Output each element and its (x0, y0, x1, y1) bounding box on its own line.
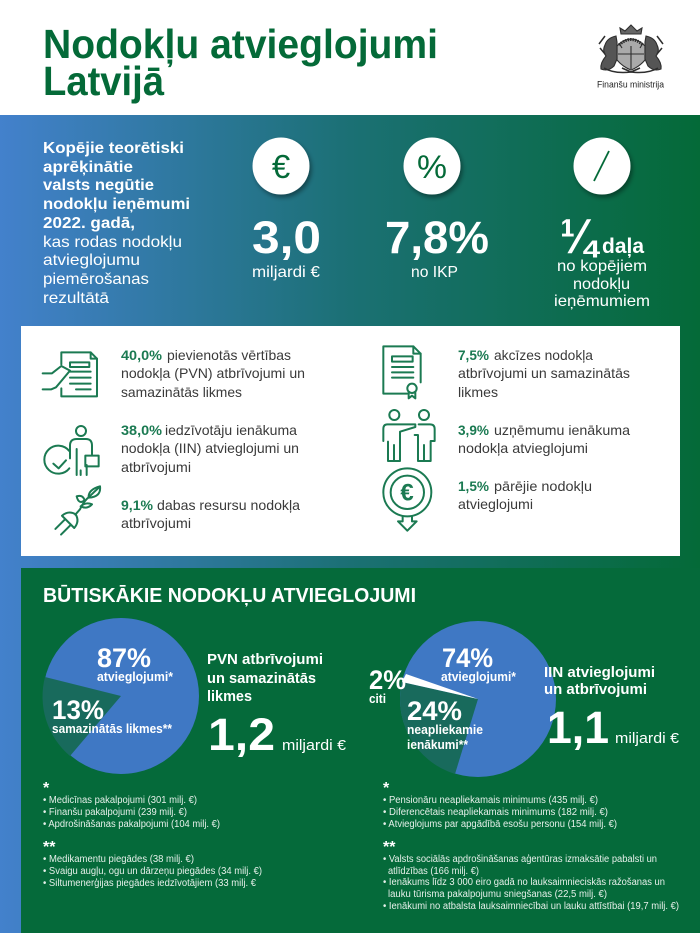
pie chart: IIN: ienākumi** (407, 738, 468, 752)
text: PVN summary (207, 651, 347, 760)
icon: fraction slash circle (574, 138, 630, 194)
stat: 1/4 daļa: ¼ (560, 210, 601, 264)
title: Nodokļu atvieglojumi (43, 21, 438, 67)
footnotes: IIN (383, 780, 679, 912)
intro text block: kas rodas nodokļu (43, 234, 182, 251)
title (43, 21, 438, 104)
icon: euro coin with arrow (383, 468, 431, 531)
heading: BŪTISKĀKIE NODOKĻU ATVIEGLOJUMI (43, 584, 416, 607)
text: IIN summary: un atbrīvojumi (544, 681, 647, 698)
intro text block: nodokļu ieņēmumi (43, 196, 190, 213)
text: 3,9% uzņēmumu: 3,9% (458, 422, 490, 438)
icon: person with check (44, 426, 99, 475)
text: 1,5% pārējie: 1,5% (458, 478, 490, 494)
intro text block: piemērošanas (43, 271, 149, 288)
panel: main reliefs (21, 568, 700, 933)
footnotes: IIN: • Atvieglojums par apgādībā esošu personu (154 milj. €) (383, 819, 617, 830)
pie chart: PVN: samazinātās likmes** (52, 722, 172, 736)
text: 40,0% PVN: samazinātās likmes (121, 384, 242, 400)
footnotes: IIN: * (383, 780, 390, 797)
text: IIN summary: IIN atvieglojumi (544, 664, 655, 681)
text: 38,0% IIN: iedzīvotāju ienākuma (165, 422, 297, 438)
pie chart: IIN: 74% (442, 643, 493, 673)
footnotes: IIN: • Ienākumi no atbalsta lauksaimniecībai un lauku attīstībai (19,7 milj. €) (383, 901, 679, 912)
footnotes: IIN: atlīdzības (166 milj. €) (388, 866, 479, 877)
text: PVN summary: miljardi € (282, 737, 347, 754)
footnotes: IIN: • Pensionāru neapliekamais minimums (435 milj. €) (383, 795, 598, 806)
text: PVN summary: 1,2 (208, 709, 275, 760)
logo: Finanšu ministrija (597, 25, 665, 90)
text: 7,5% akcīzes: 7,5% (458, 347, 490, 363)
text: 7,5% akcīzes: likmes (458, 384, 498, 400)
stat: 1/4 daļa: no kopējiem (557, 258, 647, 275)
text: 3,9% uzņēmumu (458, 422, 630, 456)
icon: certificate (383, 346, 421, 398)
text: 1,5% pārējie (458, 478, 592, 512)
text: 9,1% dabas resursu: dabas resursu nodokļa (157, 497, 300, 513)
pie chart: PVN: atvieglojumi* (97, 670, 173, 684)
stat: 7,8% no IKP: no IKP (411, 264, 458, 281)
stat: 3,0 miljardi: 3,0 (252, 212, 321, 263)
footnotes: PVN: ** (43, 839, 56, 856)
intro text block: valsts negūtie (43, 177, 154, 194)
pie chart: IIN (369, 621, 556, 777)
icon: percent circle (404, 138, 460, 194)
intro text block (43, 140, 190, 307)
footnotes: IIN: • Valsts sociālās apdrošināšanas aģentūras izmaksātie pabalsti un (383, 852, 657, 865)
icon: two people (383, 410, 435, 461)
stat: 1/4 daļa: ieņēmumiem (554, 293, 650, 310)
text: 7,5% akcīzes: akcīzes nodokļa (494, 347, 593, 363)
text: 40,0% PVN: 40,0% (121, 347, 163, 363)
icon: percent circle: % (417, 149, 447, 185)
text: 38,0% IIN: nodokļa (IIN) atvieglojumi un (121, 440, 299, 456)
intro text block: atvieglojumu (43, 252, 140, 269)
pie chart: PVN: 87% (97, 643, 151, 673)
stat: 1/4 daļa (554, 138, 650, 310)
pie chart: IIN: 24% (407, 696, 462, 726)
text: 38,0% IIN: 38,0% (121, 422, 163, 438)
pie chart: PVN: 13% (52, 695, 104, 725)
icon: euro coin with arrow: € (400, 480, 414, 507)
text: 40,0% PVN: pievienotās vērtības (167, 347, 291, 363)
footnotes: PVN: • Finanšu pakalpojumi (239 milj. €) (43, 807, 187, 818)
icon: document in hand (43, 352, 97, 396)
text: PVN summary: likmes (207, 688, 252, 705)
footnotes: PVN: • Siltumenerģijas piegādes iedzīvotājiem (33 milj. € (43, 876, 256, 889)
intro text block: 2022. gadā, (43, 215, 135, 232)
pie chart: IIN: neapliekamie (407, 723, 483, 737)
footnotes: PVN: • Svaigu augļu, ogu un dārzeņu piegādes (34 milj. €) (43, 866, 262, 877)
icon: euro circle (252, 138, 310, 194)
stat: 3,0 miljardi: miljardi € (252, 264, 320, 281)
text: 38,0% IIN (121, 422, 299, 475)
footnotes: PVN: • Apdrošināšanas pakalpojumi (104 milj. €) (43, 819, 220, 830)
title: Latvijā (43, 58, 165, 104)
stat: 7,8% no IKP: 7,8% (385, 212, 489, 263)
intro text block: rezultātā (43, 290, 109, 307)
text: 1,5% pārējie: pārējie nodokļu (494, 478, 592, 494)
text: 40,0% PVN (121, 347, 305, 400)
text: 7,5% akcīzes (458, 347, 630, 400)
pie chart: PVN (43, 618, 199, 774)
text: IIN summary: miljardi € (615, 730, 680, 747)
footnotes: PVN: * (43, 780, 50, 797)
pie chart: IIN: 2% (369, 665, 406, 695)
text: PVN summary: un samazinātās (207, 670, 316, 687)
stat: 1/4 daļa: daļa (602, 235, 644, 258)
footnotes: PVN (43, 780, 262, 889)
text: 40,0% PVN: nodokļa (PVN) atbrīvojumi un (121, 365, 305, 381)
text: 9,1% dabas resursu: 9,1% (121, 497, 154, 513)
text: 3,9% uzņēmumu: nodokļa atvieglojumi (458, 440, 588, 456)
pie chart: IIN: citi (369, 692, 386, 706)
text: 1,5% pārējie: atvieglojumi (458, 496, 533, 512)
footnotes: IIN: lauku tūrisma pakalpojumu sniegšanas (22,5 milj. €) (388, 889, 607, 900)
footnotes: PVN: • Medicīnas pakalpojumi (301 milj. €) (43, 795, 197, 806)
intro text block: Kopējie teorētiski (43, 140, 184, 157)
intro text block: aprēķinātie (43, 159, 133, 176)
stat: 7,8% no IKP (385, 138, 489, 281)
text: 38,0% IIN: atbrīvojumi (121, 459, 191, 475)
icon: euro circle: € (272, 148, 290, 185)
text: 9,1% dabas resursu: atbrīvojumi (121, 515, 191, 531)
footnotes: IIN: ** (383, 839, 396, 856)
text: 7,5% akcīzes: atbrīvojumi un samazinātās (458, 365, 630, 381)
stat: 1/4 daļa: nodokļu (573, 276, 630, 293)
text: IIN summary: 1,1 (547, 702, 609, 753)
logo text: Finanšu ministrija (597, 80, 665, 90)
footnotes: IIN: • Diferencētais neapliekamais minimums (182 milj. €) (383, 807, 608, 818)
icon: plug with leaves (52, 486, 100, 538)
text: 3,9% uzņēmumu: uzņēmumu ienākuma (494, 422, 630, 438)
text: PVN summary: PVN atbrīvojumi (207, 651, 323, 668)
footnotes: PVN: • Medikamentu piegādes (38 milj. €) (43, 854, 194, 865)
pie chart: IIN: atvieglojumi* (441, 670, 516, 684)
text: IIN summary (544, 664, 680, 753)
footnotes: IIN: • Ienākums līdz 3 000 eiro gadā no lauksaimnieciskās ražošanas un (383, 877, 665, 888)
text: 9,1% dabas resursu (121, 497, 300, 531)
panel: tax breakdown (21, 326, 680, 556)
stat: 3,0 miljardi (252, 138, 321, 281)
icon: coat of arms (599, 25, 663, 72)
